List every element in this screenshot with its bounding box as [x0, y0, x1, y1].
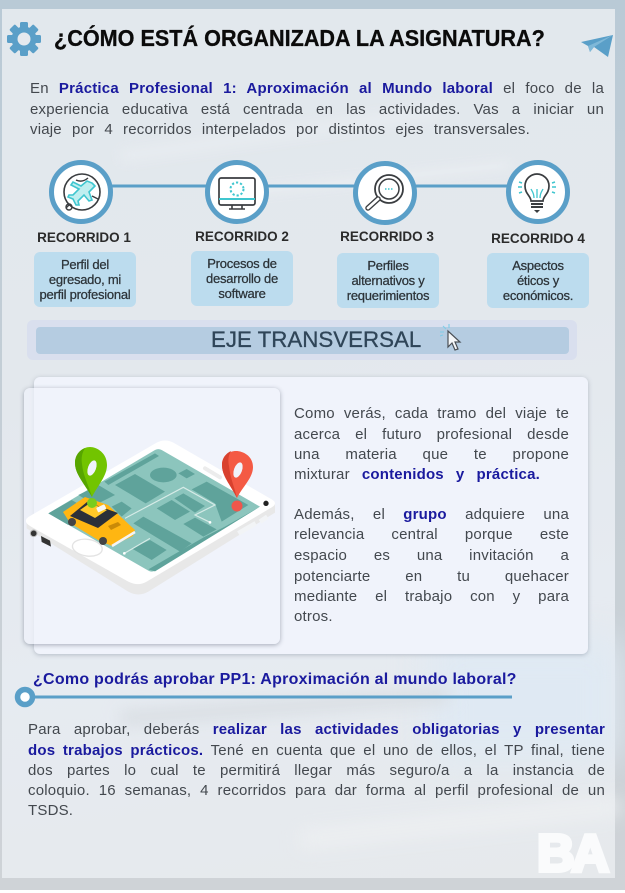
icon: paper plane: [581, 35, 613, 57]
text: description first paragraph: mixturar contenidos y práctica.: [294, 466, 540, 483]
label: recorrido 4: RECORRIDO 4: [491, 231, 585, 246]
text: how to pass: TSDS.: [28, 802, 73, 819]
icon: cursor: [440, 324, 462, 351]
text: description first paragraph: Como verás, cada tramo del viaje te: [294, 405, 569, 422]
illustration: phone with map, taxi and pins: [26, 440, 275, 594]
text: how to pass: [28, 721, 605, 819]
box: recorrido 3 description: [337, 253, 439, 308]
box: recorrido 2 description: Procesos de: [207, 256, 277, 271]
box: recorrido 2 description: software: [218, 286, 266, 301]
text: description second paragraph: mediante el trabajo con y para: [294, 588, 569, 605]
text: how to pass: dos partes lo cual te permitirá llegar más seguro/a a la instancia de: [28, 762, 605, 779]
icon: route 1 globe and plane: [52, 162, 110, 222]
box: recorrido 3 description: alternativos y: [351, 273, 425, 288]
heading: como aprobar: ¿Como podrás aprobar PP1: Aproximación al mundo laboral?: [33, 671, 517, 688]
icon: route 2 monitor: [208, 162, 266, 222]
box: recorrido 4 description: Aspectos: [512, 258, 564, 273]
icon: route 3 magnifier: [356, 164, 414, 222]
map screen: [48, 449, 260, 572]
banner: eje transversal: EJE TRANSVERSAL: [211, 327, 421, 352]
text: how to pass: Para aprobar, deberás realizar las actividades obligatorias y presentar: [28, 721, 605, 738]
red pin: [222, 451, 253, 512]
box: recorrido 4 description: económicos.: [503, 288, 573, 303]
panel: description card: [34, 377, 588, 654]
box: recorrido 2 description: desarrollo de: [206, 271, 278, 286]
intro text: En Práctica Profesional 1: Aproximación al Mundo laboral el foco de la: [30, 80, 604, 97]
title: ¿CÓMO ESTÁ ORGANIZADA LA ASIGNATURA?: [54, 25, 545, 51]
box: recorrido 4 description: éticos y: [517, 273, 559, 288]
box: recorrido 1 description: egresado, mi: [49, 272, 121, 287]
box: recorrido 1 description: [34, 252, 136, 307]
intro text: viaje por 4 recorridos interpelados por distintos ejes transversales.: [30, 121, 530, 138]
taxi: [63, 497, 135, 546]
box: recorrido 4 description: [487, 253, 589, 308]
label: recorrido 3: RECORRIDO 3: [340, 229, 434, 244]
text: description second paragraph: [294, 506, 569, 625]
intro text: experiencia educativa está centrada en las actividades. Vas a iniciar un: [30, 101, 604, 118]
green pin: [75, 447, 107, 508]
intro text: [30, 80, 604, 138]
text: description second paragraph: Además, el grupo adquiere una: [294, 506, 569, 523]
logo: BA: BA: [537, 825, 606, 883]
timeline: four routes: [49, 160, 570, 225]
text: how to pass: coloquio. 16 semanas, 4 recorridos para dar forma al perfil profesional de un: [28, 782, 605, 799]
icon: route 4 light bulb: [508, 162, 568, 222]
banner: eje transversal: [27, 320, 577, 360]
phone body: [26, 440, 275, 594]
text: description first paragraph: [294, 405, 569, 483]
box: recorrido 2 description: [191, 251, 293, 306]
label: recorrido 1: RECORRIDO 1: [37, 230, 131, 245]
box: recorrido 1 description: Perfil del: [61, 257, 109, 272]
label: recorrido 2: RECORRIDO 2: [195, 229, 289, 244]
text: description second paragraph: relevancia central porque este: [294, 526, 569, 543]
text: description second paragraph: potenciarte en tu quehacer: [294, 568, 569, 585]
box: recorrido 3 description: requerimientos: [347, 288, 429, 303]
panel: illustration card: [24, 388, 280, 644]
text: description second paragraph: otros.: [294, 608, 333, 625]
text: description first paragraph: acerca el futuro profesional desde: [294, 426, 569, 443]
icon: gear: [7, 22, 41, 56]
divider with dot: [14, 686, 512, 708]
text: how to pass: dos trabajos prácticos. Tené en cuenta que el uno de ellos, el TP final, tiene: [28, 742, 605, 759]
text: description second paragraph: espacio es una invitación a: [294, 547, 569, 564]
box: recorrido 3 description: Perfiles: [367, 258, 409, 273]
box: recorrido 1 description: perfil profesional: [40, 287, 130, 302]
text: description first paragraph: una materia que te propone: [294, 446, 569, 463]
